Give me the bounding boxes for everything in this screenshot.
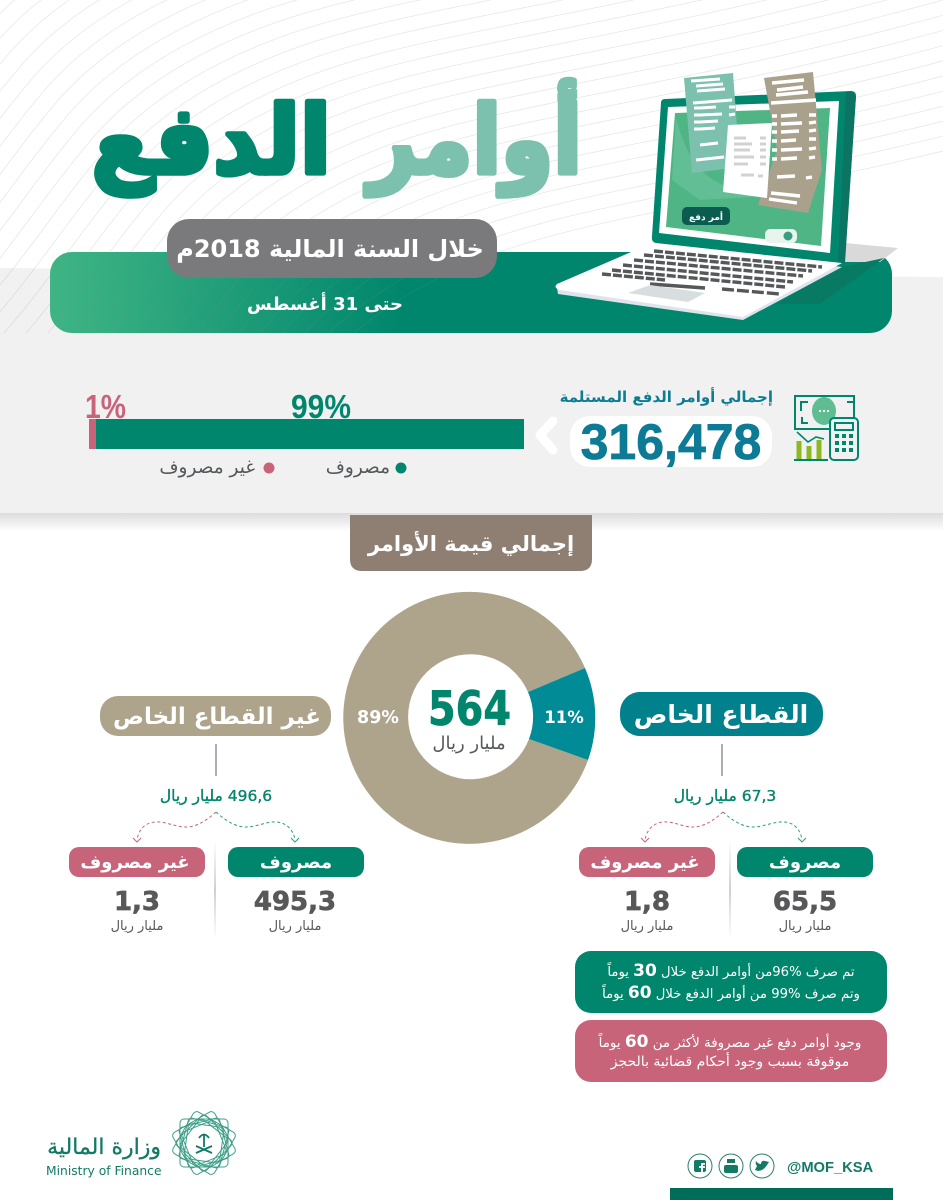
note: spent timing: [575, 951, 887, 1013]
spent: [228, 847, 364, 934]
arrow: [540, 421, 553, 450]
divider: [729, 840, 731, 940]
arrowheads: [133, 838, 299, 842]
donut chart: 11%: [544, 708, 584, 727]
donut chart: 89%: [357, 708, 399, 728]
heading: غير القطاع الخاص: [113, 704, 321, 730]
title: [92, 79, 582, 196]
spent: [737, 847, 873, 934]
heading: [620, 692, 823, 736]
heading: [100, 696, 331, 736]
receipt: teal: [684, 73, 740, 173]
legend: مصروف: [326, 457, 390, 478]
section heading: [350, 515, 592, 571]
total: 496,6 مليار ريال: [160, 787, 272, 805]
dashed arrows: [645, 812, 802, 840]
title: الدفع: [92, 86, 331, 196]
spent: 495,3: [254, 887, 336, 917]
laptop base: [556, 243, 842, 320]
unspent: غير مصروف: [590, 852, 700, 873]
unspent: مليار ريال: [111, 919, 163, 934]
note: spent timing: تم صرف %96من أوامر الدفع خلال 30 يوماً: [607, 961, 855, 981]
note: unspent reason: وجود أوامر دفع غير مصروفة لأكثر من 60 يوماً: [598, 1032, 861, 1052]
total orders number: 316,478: [581, 414, 761, 470]
laptop screen: [652, 91, 856, 263]
receipt: tan: [758, 72, 822, 213]
background wave pattern: [0, 0, 943, 333]
unspent: 1,8: [624, 887, 670, 917]
total orders heading: إجمالي أوامر الدفع المستلمة: [560, 387, 773, 406]
dashed arrows: [137, 812, 295, 840]
laptop shadow: [842, 243, 898, 262]
left column: non-private sector: [69, 696, 364, 940]
logo rosette: [171, 1110, 237, 1176]
spent: مليار ريال: [269, 919, 321, 934]
unspent: [579, 847, 715, 934]
footer bar: [670, 1188, 893, 1200]
screen logo: [765, 229, 797, 243]
spent: مليار ريال: [779, 919, 831, 934]
progress bar: 1%: [85, 388, 126, 425]
screen label: أمر دفع: [689, 211, 723, 223]
legend: [159, 457, 406, 478]
screen label: [682, 207, 730, 225]
donut chart: [343, 592, 595, 844]
background panel: [0, 268, 943, 531]
progress bar: [85, 388, 524, 449]
banner bar: [50, 252, 892, 333]
ministry logo: [46, 1110, 237, 1178]
keyboard: [602, 251, 822, 294]
unspent: غير مصروف: [80, 852, 190, 873]
section heading: إجمالي قيمة الأوامر: [367, 530, 574, 556]
period pill: خلال السنة المالية 2018م: [176, 235, 484, 263]
donut chart: مليار ريال: [432, 733, 506, 754]
spent: مصروف: [769, 852, 841, 873]
heading: القطاع الخاص: [634, 700, 808, 729]
legend: غير مصروف: [159, 457, 255, 478]
arrowheads: [641, 838, 806, 842]
icon: money calculator: [794, 396, 858, 460]
laptop illustration: [556, 72, 898, 320]
note: unspent reason: [575, 1020, 887, 1082]
social handle: @MOF_KSA: [787, 1160, 874, 1176]
unspent: 1,3: [114, 887, 160, 917]
title: أوامر: [365, 79, 582, 196]
note: unspent reason: موقوفة بسبب وجود أحكام قضائية بالحجز: [610, 1052, 849, 1070]
right column: private sector: [579, 692, 873, 940]
period pill: [167, 219, 497, 278]
receipt: white: [723, 123, 772, 198]
progress bar: 99%: [291, 388, 351, 425]
unspent: مليار ريال: [621, 919, 673, 934]
spent: مصروف: [260, 852, 332, 873]
period subtitle: حتى 31 أغسطس: [247, 292, 403, 315]
divider: [214, 840, 216, 940]
note: spent timing: وتم صرف %99 من أوامر الدفع خلال 60 يوماً: [602, 983, 860, 1003]
donut chart: 564: [428, 682, 511, 737]
unspent: [69, 847, 205, 934]
ministry logo: Ministry of Finance: [46, 1164, 162, 1178]
spent: 65,5: [773, 887, 837, 917]
trackpad: [628, 285, 705, 302]
banner shade under laptop: [775, 258, 884, 304]
total: 67,3 مليار ريال: [674, 787, 776, 805]
logo text: وزارة المالية: [47, 1135, 161, 1160]
social icons: [688, 1154, 774, 1178]
